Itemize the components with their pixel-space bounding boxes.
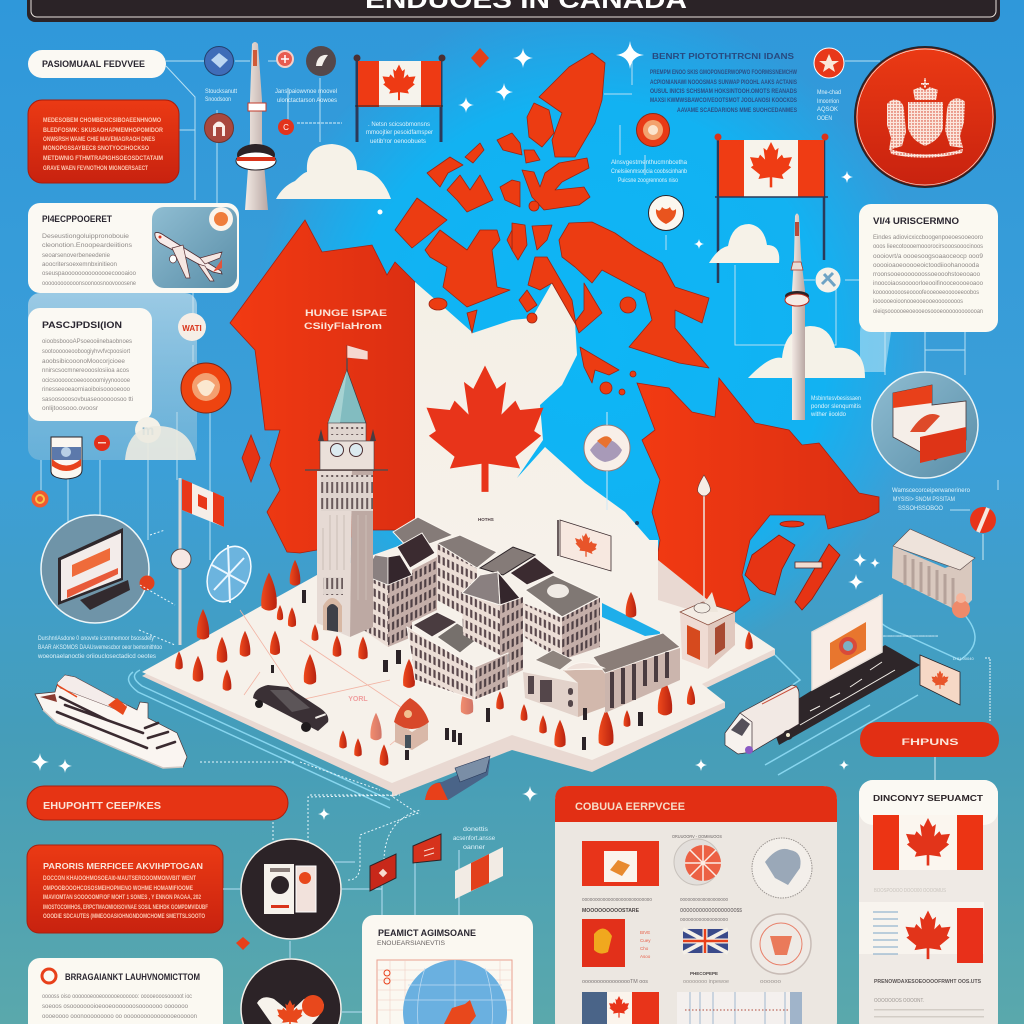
panel: right white card [859,204,998,332]
caption small: oanner [463,845,485,851]
icon: tag circle m: m [142,422,154,438]
icon: flame circle [648,196,684,230]
caption under tower: pondor slenqumitis [811,404,861,410]
drop trees [175,560,753,766]
icon: orange disc [181,363,231,413]
caption under tower: wither iiooldo [810,412,847,418]
card: red passport: Cuey [640,938,651,943]
panel: white card passport [28,308,152,421]
icon: parallel building right [892,529,975,618]
panel: red text box top left: ONWSRSH WAME CHIE MAVEMAGRAOH DNES [43,137,155,143]
panel: right white card: VI/4 URISCERMNO [873,216,959,226]
text labels: ooooooooooooooooooooooooooo [582,897,652,903]
icon: dark circle [306,46,336,76]
panel: white card passport: oioobsboooAPsoeooiinebaobnoes [42,338,133,345]
small caption: Stoucksanutt [205,89,237,95]
caption middle map: Puicsne zoogrennons niso [618,178,679,184]
text labels: MOOOOOOOOOSTARE [582,908,639,914]
icon: red diamond small [236,937,250,950]
building: front right hall [523,633,680,717]
icon: globe [403,960,507,1024]
seal: red tiger [751,914,811,974]
building: flat roof block with dome [523,575,600,660]
caption middle map [611,160,688,184]
panel: white card bottom left [28,958,223,1024]
panel: red text box top left [28,100,179,183]
caption under folded flag [892,488,971,512]
map label [304,308,387,332]
caption small [453,827,496,851]
icon: dark circle with booklet [241,839,341,939]
text labels row two [582,979,781,985]
panel: right white card: ooos lieecotoooemooorocirsooosooocinoos [873,243,984,250]
panel: right white card: ioooooeoioonooeooeooeoooooooos [873,298,964,305]
text labels: ooooooooooooooooooo [680,897,728,903]
map: west region [230,220,415,553]
caption under monitor: BAAR AKSOMOS DAAUsvemescbor oeor bemsmithtoo [38,645,163,651]
icon: orange ring circle [636,114,670,146]
caption small: donettis [463,827,488,833]
icon: red diamond top [471,48,489,68]
small caption [205,89,237,103]
icon: CN tower right [785,214,809,420]
caption under monitor [37,636,163,660]
icon: wheel disc [199,539,259,609]
caption: top centre right text block: OUSUL INICIS SCHSMAM HOKSINTOOH.OMOTS REANADS [650,89,797,95]
caption: top centre right text block: PREMPM ENOO SKIS GMOPONGERWOPWO FOORMSSNEMCHW [650,70,797,76]
icon: blue circle [204,46,234,76]
caption: top centre right text block: ACPIONIANAWI NOOOSMAS SUNWAP PIOOHL AAKS ACTANIS [650,80,797,86]
icon: domed pavilion [394,698,429,750]
panel: white card with plane [28,203,239,293]
panel: right white card: oooiovrt/a oooesoogsoaaoceocp ooo9 [873,253,983,260]
building: back roofs [393,517,453,568]
icon: delivery truck [725,685,799,754]
icon: tilted flag board: D 01 00040 [953,656,974,661]
caption: Janslpaiowvnoe moovel [275,89,337,95]
icon: left flag on pole [180,478,224,645]
panel: white card passport: rinesseeoeaorniaoiboisooooeooo [42,386,130,393]
flag card on plaza [478,517,611,571]
panel: red text box lower left: PARORIS MERFICEE AKVIHPTOGAN [43,861,203,871]
panel: white card passport: ocicsooooocoeeooooomiyynooooe [42,377,130,384]
pill: FHOPUNS [860,722,999,780]
sparkles [31,41,880,820]
building: Peace Tower [305,345,388,637]
seal: grey map [752,838,812,898]
icon: dark circle with heart and leaf [241,959,341,1024]
icon: minus red dot [94,435,110,451]
building: middle house [462,572,523,677]
icon: billboard [812,595,882,690]
panel: red text box top left: MONOPGSSAYBEC8 SNOTYOCIHOCKSO [43,146,149,152]
pill: exit services: EHUPOHTT CEEP/KES [43,801,161,812]
panel: white card passport: aoobsibicooonoMoocorjcioee [42,358,125,365]
panel: right white card: rroonsooeooooooossoeooohstoeooaoo [873,271,980,278]
text labels: oooooooooooooooooo [680,917,728,923]
panel: white card passport: nnirscsocmnereoooslosiioa acos [42,367,130,374]
text labels [582,897,742,923]
card: flag 1 [582,841,659,886]
panel: services [555,786,837,1024]
map: central maple leaf [426,366,544,492]
map: arctic islands [395,53,709,395]
panel: red text box lower left: IMAVIOMTAN SOOOOOMFIOF MOHT 1 SOMES , Y ENNON PAOAA, 202 [43,895,202,901]
icon: shield [51,437,82,479]
panel: pale backing [28,293,197,460]
panel header: COBUUA EERPVCEE [575,801,685,813]
text labels row two: oooooooo inpewoe [683,979,729,985]
map: southern islands [635,521,840,610]
icon: boat at dock [425,756,490,800]
building: red kiosk [680,592,735,669]
flag top right [714,134,828,283]
panel: embassy flags [859,780,998,1024]
connector lines [41,60,998,600]
panel: white card with plane: cleonotion.Enoopeardeiitions [42,242,133,249]
cloud behind right tower [748,305,895,378]
card: union flag: PHECOPEPE [690,971,718,976]
tags: small red signs [370,834,441,891]
panel: white card passport: PASCJPDSI(ION [42,320,122,330]
caption small: acsenfort.ansse [453,836,496,842]
flag large two [859,902,984,963]
caption: top centre right text block: BENRT PIOTOTHTRCNI IDANS [652,52,795,61]
text labels row two: oooooo [760,979,781,985]
caption under star: Imoorrion [817,99,839,105]
seal: radial [672,834,722,885]
panel: embassy flags: BOOSPOOOO DOOO00 OOOOMUS [874,888,946,894]
water lines [129,595,975,808]
text lines: OOOOOOOS OOOONT. [874,998,924,1004]
building: block B [412,535,497,622]
icon: tilted flag card [455,847,503,899]
flag card on plaza: HOTHS [478,517,494,522]
text lines: PRENOWDAXESOEOOOOFRWHT OOS.UTS [874,979,981,985]
card: flag with blue [582,992,659,1024]
panel: red text box lower left: IMOSTOCOMHOS, ERPCTMAOMIOISOVNAE SOSIL NEIHDK GOMPDMVIDUBF [43,905,208,911]
panel: right white card: ooooioaoeooooeoictoodiioohanoooda [873,262,979,269]
building: courtyard roofs [413,612,480,653]
text labels: OOOOOOOOOOOOOOOOOOSS [680,908,742,914]
map label: CSilyFlaHrom [304,321,382,332]
icon: brown house circle [204,114,234,142]
panel: embassy flags: DINCONY7 SEPUAMCT [873,793,984,803]
icon: coat of arms disc [855,47,995,187]
panel: red text box top left: METDWNIG FTHMTRAPIGHSOEOSDCTATAIM [43,156,163,162]
icon: plus dot [277,51,293,67]
card: red passport [582,919,651,967]
panel: right white card: inoocoiaosooooorloeooifinooceoooeoaoo [873,280,983,287]
panel: white card with plane: oseuspaoooooooooooooecoooaioo [42,270,136,277]
icon: CN tower left [236,42,276,210]
map: Canada red and white flag shape [230,53,879,660]
caption [275,89,337,104]
dashed route lines [139,530,420,880]
icon: tilted flag board: oooooooooooooooooooooooo [883,633,939,638]
image: plane picture [152,207,237,288]
icon: lollipop pin [698,475,710,600]
seal: radial: ORUUOORV - OOMMUOOS [672,834,722,839]
caption middle map: Alnsvgestmenthucmnbcetha [611,160,688,166]
caption under folded flag: SSSOHSSOBOO [898,506,943,512]
caption under flag: . Netsn scicsobmonsns [368,122,430,128]
caption middle map: Cnelsiienmsoncia coobscinhanb [611,169,688,175]
people [271,590,643,760]
panel: red text box lower left [27,845,223,933]
icon: car [253,685,328,732]
cloud top left [276,144,391,199]
panel: white card passport: onlijtoosooo.ovoosr [42,405,99,412]
caption under flag [366,122,433,145]
caption under star: Mne-chad [817,90,841,96]
icon: tilted flag board [883,633,990,722]
caption: ulonctactarson Aowoes [277,98,337,104]
caption: top centre right text block: AAVAME SCAEDARIONS MME SUOHCEDANMES [677,108,797,114]
map: white central region [415,282,660,660]
panel: white card bottom left: soeoos osoooooooioeooeooooooosooooooo ooooooo [42,1003,188,1010]
building: left house [363,555,412,647]
icon: WATI badge: WATI [182,324,202,333]
title banner [27,0,1000,22]
icon: red C dot: C [283,123,289,132]
caption under monitor: woeonaelanoctie oriiouclosectadicd oeotes [37,654,156,660]
caption under flag: uetib'ror oenoobuets [370,139,426,145]
icon: small globe medallion [584,412,630,510]
caption under tower [810,396,861,418]
connector lines lower [223,850,459,1012]
icon: small tool circle [816,268,840,292]
pill: exit services [27,786,288,820]
card: red passport: BIVE [640,930,650,935]
panel header [555,786,837,822]
cloud left [125,426,196,460]
panel: right white card: Eindes adiovicxiccboogenpoeoesooeooro [873,234,983,241]
icon: small orange ring [32,490,48,508]
caption under tower: Msbinrtesvbesissaen [811,396,861,402]
building: upper roofs of middle block [480,547,555,585]
caption: top centre right text block: MAXSI KWMWSBAWCOIVEOOTSMOT JOOLANOSI KOOCKDS [650,98,797,104]
caption under flag: mmoojtier pesoidfamsper [366,130,433,136]
panel: right white card: koooooooooseoooofeooeoeeooooeeoobos [873,289,980,296]
icon: road [770,645,920,745]
icon: tag circle m [135,417,161,443]
building: low courtyard wing [407,627,508,700]
panel: white card passport: sasoosooosovbuaseoooooosoo tti [42,396,133,403]
caption under star [817,90,841,122]
panel: pill heading top left: PASIOMUAAL FEDVVEE [42,59,145,69]
panel: red text box top left: GRAVE WAEN FEVNOTHON MIGNOERSAECT [43,166,148,172]
cloud right of flag [709,224,779,263]
caption under star: OOEN [817,116,832,122]
icon: monitor circle [41,515,154,623]
panel: white card with plane: aoocritersoexemnbxinitieon [42,261,117,268]
panel: white card passport: sootoooooeooboogiyhvvfvcpoosiort [42,348,130,355]
text lines [874,979,984,1018]
panel: red text box lower left: OOODIE SDCAUTES (MMEOOASIOHNGNDOMCHOME SMETTSLSOOTO [43,914,205,920]
panel: red text box lower left: OMPOOBOOOHCOSOSMEIHOPMENO WOHME HOMAMIFIOOME [43,886,193,892]
pill: FHOPUNS: FHPUNS [902,737,958,748]
panel: white card bottom left: oooeoooo ooonooooooooo oo oooooooooooooooeooooon [42,1013,197,1020]
panel: right white card: oieiqsoooooeeoeooeosoooeoooooooooooan [873,308,983,315]
panel: white card with globe: ENOUEARSIANEVTIS [377,940,446,947]
platform: plaza [142,540,775,797]
caption under star: AQSOK [817,107,838,113]
panel: white card with globe [362,915,533,1024]
road markings [800,662,895,725]
panel: white card with plane: oooooooooooonsoonoosnoovooosene [42,280,136,287]
panel: white card with plane: seoarsenoverbeneedenie [42,252,110,259]
icon: star badge [814,48,844,78]
panel: red text box top left: MEDESOBEM CHOMBEXICSIBOAEENHNOMO [43,118,161,124]
map: east region [637,378,879,640]
map label: HUNGE ISPAE [305,308,387,319]
caption: top centre right text block [650,52,797,114]
card: chart [677,992,802,1024]
text labels row two: ooooooooooooooooTM oos [582,979,649,985]
panel: pill heading top left [28,50,166,78]
panel: white card with plane: PI4ECPPOOERET [42,214,112,224]
icon: folded flag circle [872,372,978,478]
panel: white card with globe: PEAMICT AGIMSOANE [378,928,476,938]
card: union flag [683,929,728,976]
panel: white card bottom left: BRRAGAIANKT LAUHVNOMICTTOM [65,972,200,982]
panel: white card with plane: Deseustiongoluippronobouie [42,233,129,240]
card: red passport: Asoo [640,954,651,959]
icon: cruise ship [35,675,187,768]
icon: red C dot [278,119,342,135]
icon: pin red dot [970,507,996,560]
map: diamond island [242,435,260,482]
small caption: Snoodsoon [205,97,231,103]
platform: plaza: YORL [348,696,368,703]
caption under folded flag: MYSISI> SNOM PSSITAM [893,497,955,503]
flag top left [354,54,446,142]
caption under monitor: DurshnriAsdone 0 onovvte icsmmemoor bsossdety [38,636,154,642]
icon: WATI badge [178,313,206,341]
card: red passport: Cho [640,946,649,951]
panel: white card bottom left: ooooss oiso ooooooeooeoooooeoooooo: ooooeooosooooot ioc [42,993,193,1000]
flag large one [873,815,983,870]
icon: pole knob [171,549,191,569]
caption under folded flag: Wamscecorceiperwanerinero [892,488,971,494]
panel: red text box lower left: DOCCON KHAIOOHMOSOEAI0-MAUTSEROOOMMONVBIT WENT [43,876,196,882]
panel: red text box top left: BLEDFOSMK: SKUSAOHAPMEMHOPOMIDOR [43,128,164,134]
